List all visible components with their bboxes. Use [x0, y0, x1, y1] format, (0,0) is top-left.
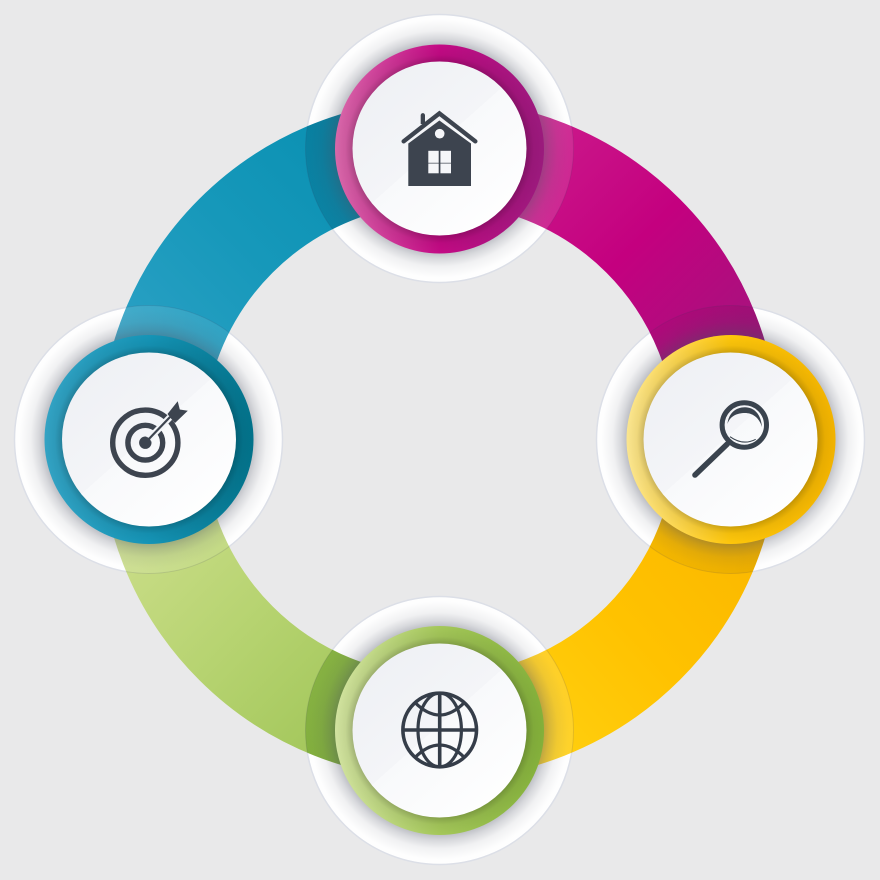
- icon: magnifying glass: [695, 403, 766, 475]
- segment: blue: [152, 152, 440, 440]
- band tints inside the discs: [114, 114, 764, 765]
- segment: green: [152, 440, 440, 728]
- circular band of four coloured segments: [152, 152, 728, 728]
- node: globe: [306, 596, 574, 864]
- icon: target with arrow: [113, 401, 188, 475]
- icon: globe: [403, 693, 477, 767]
- node: home: [306, 14, 574, 282]
- segment: magenta: [440, 152, 728, 440]
- node: target: [14, 306, 282, 574]
- segment: yellow: [440, 440, 728, 728]
- node: search: [596, 306, 864, 574]
- icon: house: [404, 113, 475, 186]
